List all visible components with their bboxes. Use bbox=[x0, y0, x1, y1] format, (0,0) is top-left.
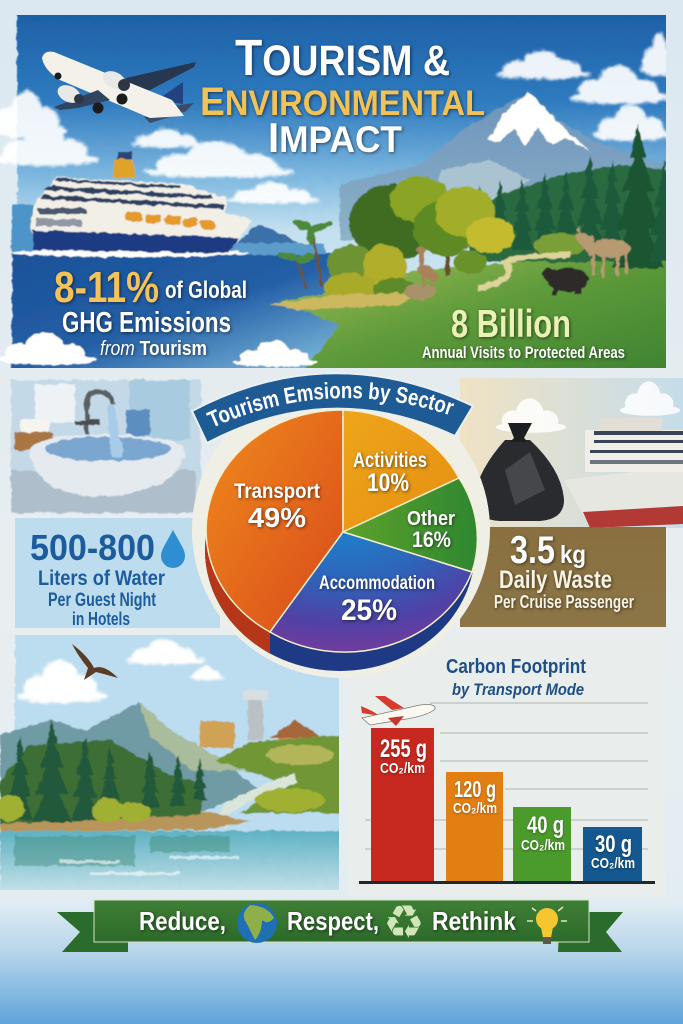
cabinet bbox=[35, 384, 75, 422]
stat: protected area visits bbox=[422, 303, 625, 362]
conifer forest bbox=[470, 124, 680, 268]
slice: Other: Other bbox=[407, 508, 455, 530]
bar: 255 g: CO₂/km bbox=[380, 760, 425, 777]
panel: carbon footprint chart: by Transport Mode bbox=[452, 680, 584, 699]
cruise ship bbox=[30, 152, 252, 253]
slogan: Reduce: Reduce, bbox=[139, 906, 226, 936]
bar: 30 g bbox=[583, 827, 642, 881]
stat: protected area visits: 8 Billion bbox=[451, 303, 571, 346]
broadleaf island trees bbox=[324, 176, 514, 303]
panel: water use: Per Guest Night bbox=[48, 590, 157, 611]
river bbox=[224, 778, 296, 825]
pie title banner: Tourism Emsions by Sector bbox=[206, 382, 454, 426]
airplane bbox=[42, 52, 196, 123]
bar: 120 g bbox=[446, 772, 503, 881]
icon: globe bbox=[237, 903, 277, 943]
clouds bbox=[0, 33, 680, 204]
cruise ship bbox=[564, 418, 683, 528]
title: IMPACT bbox=[268, 114, 402, 161]
slogan: Rethink: Rethink bbox=[432, 906, 516, 936]
panel: water use: Liters of Water bbox=[38, 567, 165, 590]
land bbox=[280, 260, 666, 368]
mountain bbox=[340, 92, 666, 240]
bar: 120 g: 120 g bbox=[454, 776, 496, 802]
slice: Accommodation bbox=[270, 532, 472, 652]
bar: 40 g: CO₂/km bbox=[521, 837, 565, 854]
stat: daily waste: 3.5 bbox=[510, 529, 555, 572]
shore bbox=[0, 808, 250, 832]
icon: eagle bbox=[72, 644, 118, 680]
bar: 40 g: 40 g bbox=[527, 812, 564, 839]
bear bbox=[542, 268, 588, 295]
palm trees bbox=[276, 218, 334, 288]
town bbox=[200, 690, 322, 748]
large deer bbox=[576, 226, 630, 278]
panel: water use: 500-800 bbox=[30, 527, 155, 568]
slice: Other: 16% bbox=[412, 527, 451, 552]
pie chart bbox=[192, 382, 490, 678]
stat: GHG emissions: from Tourism bbox=[100, 338, 207, 360]
stat: GHG emissions bbox=[54, 263, 247, 360]
title: TOURISM & bbox=[235, 29, 450, 86]
panel: hero scene bbox=[0, 10, 680, 374]
sink bbox=[30, 434, 185, 497]
towel box bbox=[15, 420, 53, 450]
panel: hotel bathroom bbox=[11, 380, 201, 513]
panel: landscape bbox=[0, 630, 345, 895]
bar: 30 g: 30 g bbox=[595, 831, 632, 858]
rocks bbox=[404, 284, 436, 300]
icon: light bulb bbox=[527, 907, 567, 944]
forest bbox=[0, 720, 208, 824]
panel: carbon footprint chart bbox=[348, 636, 666, 898]
small deer bbox=[415, 246, 441, 287]
panel: cruise waste: Per Cruise Passenger bbox=[494, 592, 634, 612]
stat: protected area visits: Annual Visits to Protected Areas bbox=[422, 343, 625, 362]
ribbon tails bbox=[57, 912, 128, 952]
panel: cruise waste: Daily Waste bbox=[499, 566, 612, 594]
slice: Transport: Transport bbox=[234, 480, 320, 503]
slice: Other bbox=[343, 478, 477, 572]
stat: GHG emissions: of Global bbox=[165, 277, 247, 304]
icon: water drop bbox=[161, 530, 185, 568]
distant island bbox=[236, 225, 298, 243]
bar: 255 g bbox=[371, 728, 434, 881]
slice: Activities bbox=[343, 410, 459, 532]
stone counter bbox=[11, 470, 196, 513]
bottle bbox=[126, 410, 150, 435]
pie rim bbox=[205, 429, 475, 671]
lake bbox=[0, 831, 345, 893]
slice: Activities: Activities bbox=[353, 449, 427, 472]
bar: 30 g: CO₂/km bbox=[591, 855, 635, 872]
sky bbox=[15, 15, 666, 274]
panel: cruise waste bbox=[460, 378, 683, 627]
garbage bag bbox=[473, 423, 564, 521]
surf bbox=[11, 248, 250, 260]
ocean bbox=[12, 253, 357, 373]
faucet bbox=[87, 392, 113, 436]
icon: recycle: ♻ bbox=[383, 895, 425, 949]
panel: water use: in Hotels bbox=[72, 609, 130, 629]
stat: GHG emissions: GHG Emissions bbox=[62, 307, 231, 339]
slice: Accommodation: 25% bbox=[341, 594, 397, 627]
path bbox=[478, 255, 570, 288]
panel: water use bbox=[15, 518, 220, 629]
bar: 120 g: CO₂/km bbox=[453, 800, 497, 817]
icon: red airplane bbox=[361, 696, 435, 726]
slogan: Respect: Respect, bbox=[287, 906, 379, 936]
title bbox=[200, 29, 485, 161]
panel: cruise waste: kg bbox=[560, 541, 586, 569]
slice: Transport bbox=[206, 410, 343, 632]
bar: 255 g: 255 g bbox=[380, 735, 427, 763]
stat: GHG emissions: 8-11% bbox=[54, 263, 159, 312]
pie title banner bbox=[190, 374, 474, 472]
green hills bbox=[215, 735, 345, 813]
slice: Accommodation: Accommodation bbox=[319, 573, 435, 594]
bottom clouds bbox=[0, 332, 96, 365]
mountains bbox=[0, 702, 260, 820]
title: ENVIRONMENTAL bbox=[200, 80, 485, 124]
slice: Transport: 49% bbox=[248, 502, 306, 533]
bar: 40 g bbox=[513, 807, 571, 881]
shore bbox=[270, 292, 420, 310]
slice: Activities: 10% bbox=[367, 469, 409, 497]
water stream bbox=[107, 405, 124, 458]
closing ribbon bbox=[57, 895, 623, 952]
chart title: Carbon Footprint bbox=[446, 656, 586, 678]
